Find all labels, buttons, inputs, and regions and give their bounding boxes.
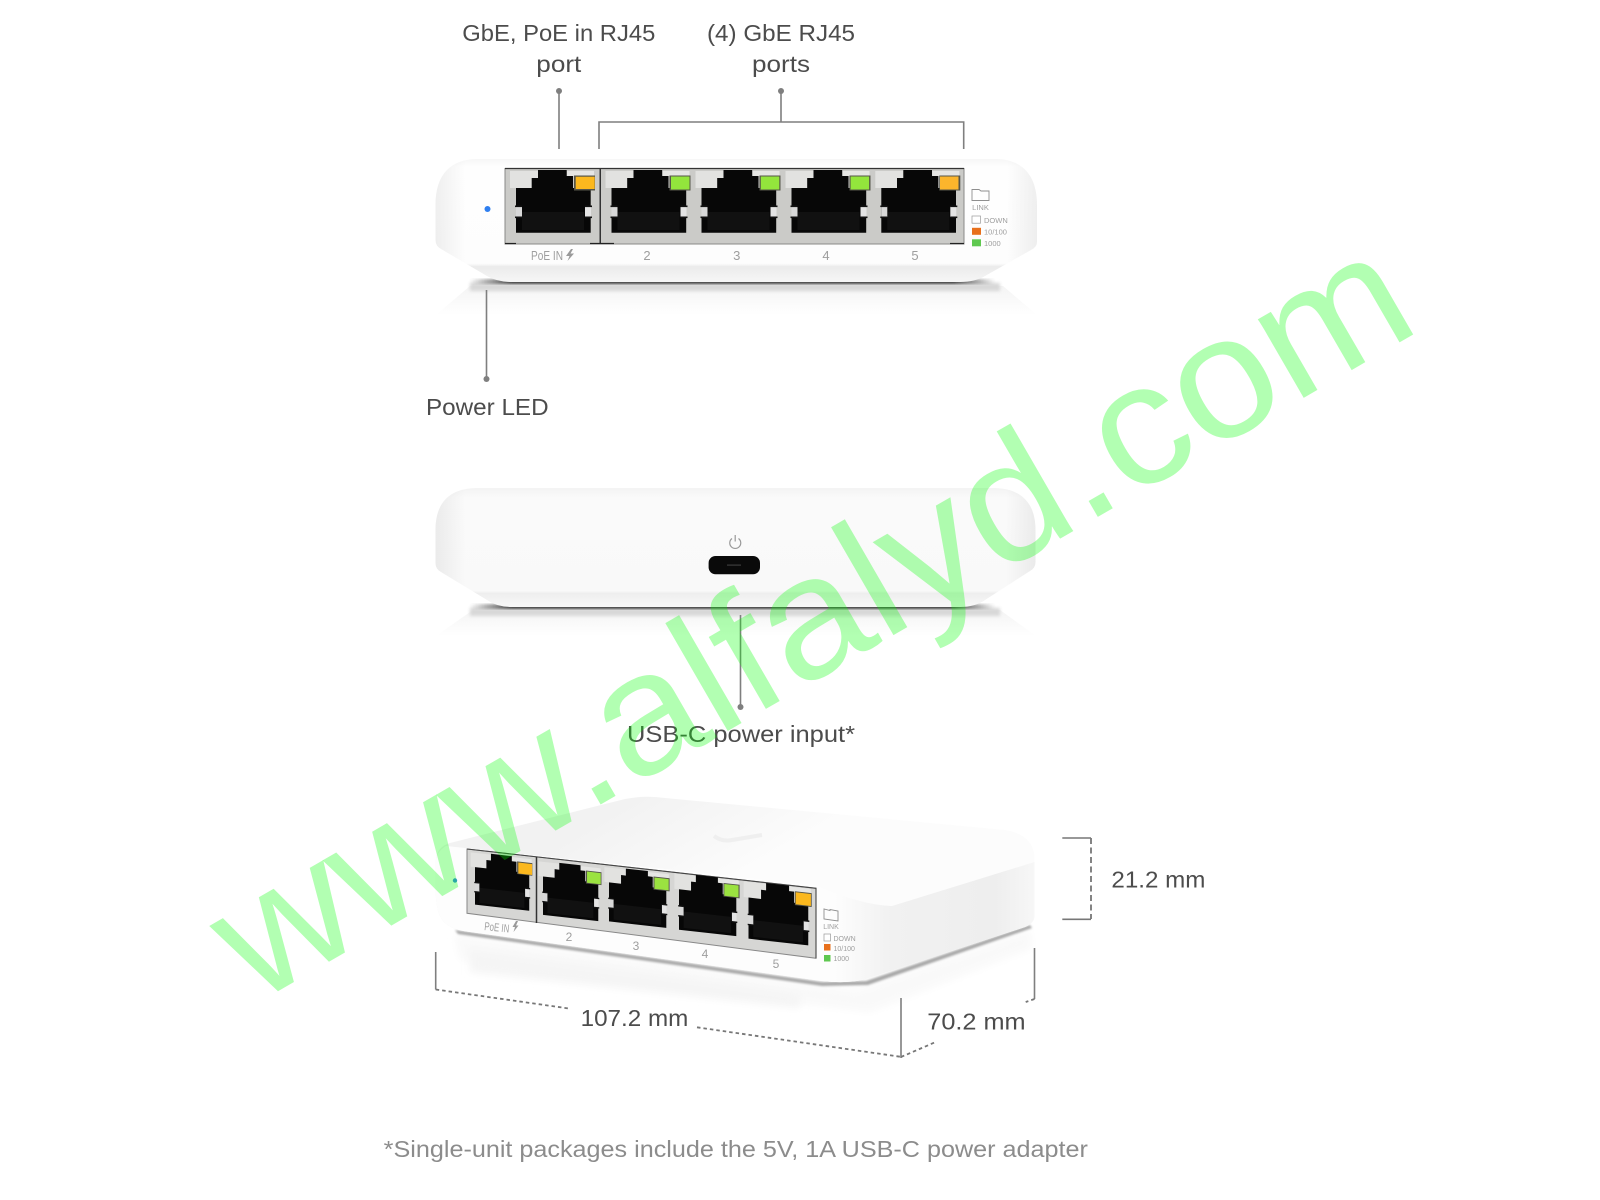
USB-C contact [727, 564, 741, 566]
bracket: height dimension [1062, 838, 1091, 919]
port labels: PoE IN [531, 248, 563, 263]
perspective shadow [455, 925, 1032, 986]
front view soft shadow [470, 283, 1000, 291]
perspective port labels: 4 [702, 947, 709, 961]
port labels [531, 248, 919, 263]
port 3 [696, 170, 780, 233]
device: perspective view switch [436, 797, 1034, 1012]
rear view body [436, 488, 1036, 607]
perspective port labels [484, 921, 780, 971]
port 2 [606, 170, 690, 233]
port 5 [875, 170, 960, 233]
perspective port 4 [674, 872, 740, 937]
perspective port labels: 3 [633, 939, 640, 953]
perspective top logo [714, 835, 762, 840]
icon: power symbol [730, 535, 741, 548]
perspective front face [436, 846, 860, 982]
port 1 PoE in [510, 170, 595, 233]
rear view soft shadow [470, 608, 1000, 616]
port labels: 4 [822, 248, 830, 263]
perspective port labels: PoE IN [484, 921, 510, 936]
front view edge shading [436, 159, 1037, 282]
port labels: 5 [911, 248, 919, 263]
perspective body [436, 797, 1034, 982]
label: USB-C power input: USB-C power input* [627, 721, 855, 747]
device: front view switch [436, 159, 1037, 315]
label: 4 GbE RJ45 ports [707, 20, 855, 77]
footnote: *Single-unit packages include the 5V, 1A USB-C power adapter [384, 1136, 1088, 1162]
perspective port 5 [744, 880, 812, 946]
port labels: 3 [733, 248, 740, 263]
USB-C port [709, 556, 760, 574]
device: rear view switch [436, 488, 1036, 636]
icon: power LED [484, 206, 490, 212]
port panel [505, 168, 964, 244]
label: GbE PoE in RJ45 port [462, 20, 655, 77]
rear view reflection [436, 610, 1036, 636]
front view reflection [436, 286, 1037, 315]
perspective port panel [467, 849, 816, 958]
leader: power LED [484, 290, 490, 382]
label: 4 GbE RJ45 ports: (4) GbE RJ45 [707, 20, 855, 46]
status legend: 1000 [984, 239, 1001, 248]
perspective port 2 [539, 861, 601, 921]
bracket: GbE ports [599, 88, 964, 149]
leader: GbE PoE port [556, 88, 562, 149]
perspective side face [816, 862, 1034, 982]
label: 4 GbE RJ45 ports: ports [752, 51, 810, 77]
status legend: 10/100 [984, 228, 1007, 237]
leader: USB-C input [738, 615, 744, 710]
label: width: 107.2 mm [581, 1005, 688, 1031]
label: height: 21.2 mm [1111, 866, 1205, 892]
rear view contact shadow [470, 604, 995, 609]
status legend [972, 190, 1008, 248]
front view body [436, 159, 1037, 282]
perspective status legend: 10/100 [834, 946, 855, 953]
label: power LED: Power LED [426, 394, 549, 420]
front view contact shadow [470, 279, 995, 284]
perspective port labels: 2 [566, 930, 573, 944]
perspective port 1 [471, 852, 532, 911]
perspective power LED [453, 878, 457, 883]
perspective port 3 [604, 866, 670, 928]
dimension: width bracket [436, 952, 901, 1058]
perspective status legend: DOWN [834, 936, 856, 943]
label: depth: 70.2 mm [927, 1008, 1026, 1034]
label: GbE PoE in RJ45 port: GbE, PoE in RJ45 [462, 20, 655, 46]
perspective status legend: LINK [823, 924, 839, 931]
port labels: 2 [643, 248, 651, 263]
watermark: www.alfalyd.com [176, 194, 1442, 1037]
status legend: LINK [972, 203, 989, 212]
perspective reflection [455, 930, 1032, 1012]
perspective port labels: 5 [773, 957, 780, 971]
status legend: DOWN [984, 216, 1008, 225]
port 4 [786, 170, 870, 233]
perspective status legend: 1000 [834, 956, 849, 963]
perspective status legend [823, 909, 856, 963]
dimension: depth bracket [901, 948, 1034, 1057]
rear view edge shading [436, 488, 1036, 607]
label: GbE PoE in RJ45 port: port [536, 51, 582, 77]
